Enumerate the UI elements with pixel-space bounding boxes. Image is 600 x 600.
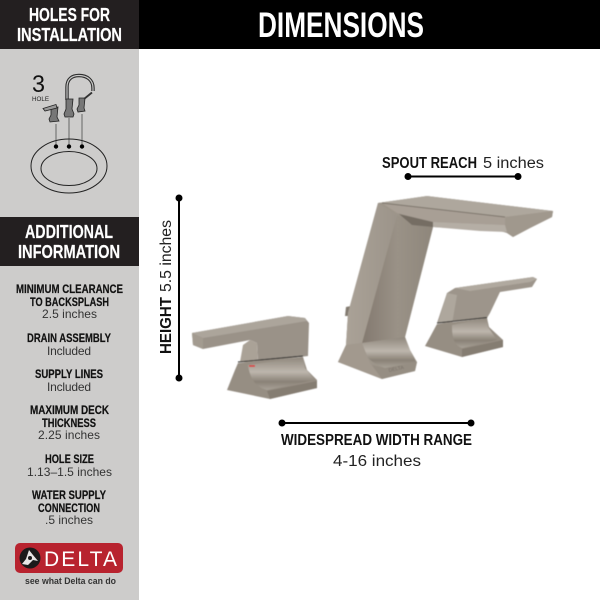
- dimension: spout reach: [382, 155, 544, 180]
- seam: [238, 356, 303, 362]
- neck facet: [438, 293, 457, 324]
- text block: maximum deck thickness: THICKNESS: [42, 418, 96, 430]
- front band: [382, 203, 505, 225]
- text block: drain assembly: [27, 333, 111, 358]
- sidebar background: [0, 0, 139, 600]
- logo: delta: [15, 543, 123, 587]
- engraved delta mark: DELTA: [388, 365, 405, 374]
- text block: minimum clearance: MINIMUM CLEARANCE: [16, 284, 123, 296]
- dimension: widespread width range: [278, 420, 474, 470]
- dimension: widespread width range: 4-16 inches: [333, 453, 421, 470]
- logo: delta: see what Delta can do: [25, 576, 116, 587]
- icon: three hole faucet and basin diagram: [31, 71, 107, 193]
- dimension: spout reach: 5 inches: [483, 155, 544, 172]
- label: 3 hole: 3: [32, 71, 45, 98]
- heading: additional information: ADDITIONAL: [25, 222, 113, 242]
- base concave: [248, 357, 315, 390]
- heading: holes for installation: INSTALLATION: [17, 25, 122, 45]
- lever top band: [192, 316, 307, 338]
- icon: basin: [31, 139, 107, 193]
- base concave: [452, 318, 497, 348]
- text block: maximum deck thickness: 2.25 inches: [38, 428, 100, 442]
- base: [425, 318, 503, 357]
- lever top band: [455, 277, 537, 291]
- illustration: left handle: [192, 316, 317, 399]
- text block: minimum clearance: TO BACKSPLASH: [30, 297, 109, 309]
- text block: minimum clearance: 2.5 inches: [42, 307, 97, 321]
- text block: maximum deck thickness: MAXIMUM DECK: [30, 405, 110, 417]
- text block: hole size: HOLE SIZE: [45, 454, 94, 466]
- bottom concave: [362, 337, 416, 368]
- dimension: height: 5.5 inches: [158, 220, 175, 292]
- heading: holes for installation: [0, 0, 139, 49]
- dimension: height: [158, 194, 182, 382]
- top plate: [378, 196, 553, 217]
- dimension: widespread width range: WIDESPREAD WIDTH RANGE: [281, 432, 472, 449]
- logo: delta: DELTA: [44, 548, 117, 571]
- body right face: [362, 215, 433, 343]
- lever body: [437, 277, 537, 323]
- label: 3 hole: [32, 71, 50, 103]
- text block: supply lines: SUPPLY LINES: [35, 369, 103, 381]
- heading: additional information: INFORMATION: [18, 242, 120, 262]
- spout end face: [505, 211, 553, 237]
- text block: hole size: [27, 454, 112, 479]
- text block: water supply connection: CONNECTION: [38, 503, 100, 515]
- lever body: [192, 316, 309, 362]
- dimension: spout reach: SPOUT REACH: [382, 155, 477, 172]
- text block: supply lines: [35, 369, 103, 394]
- dimension: height: HEIGHT: [158, 297, 175, 354]
- base: [227, 357, 317, 399]
- text block: water supply connection: WATER SUPPLY: [32, 490, 106, 502]
- text block: water supply connection: .5 inches: [45, 513, 93, 527]
- text block: supply lines: Included: [47, 380, 91, 394]
- label: 3 hole: HOLE: [32, 96, 50, 103]
- text block: drain assembly: DRAIN ASSEMBLY: [27, 333, 111, 345]
- seam: [437, 318, 487, 323]
- text block: minimum clearance: [16, 284, 123, 321]
- illustration: right handle: [425, 277, 537, 357]
- text block: hole size: 1.13–1.5 inches: [27, 465, 112, 479]
- heading: additional information: [0, 217, 139, 266]
- text block: drain assembly: Included: [47, 344, 91, 358]
- icon: delta emblem: [20, 548, 40, 568]
- text block: maximum deck thickness: [30, 405, 110, 442]
- lever neck: [240, 340, 258, 363]
- heading: dimensions: DIMENSIONS: [258, 6, 424, 45]
- body left face: [346, 203, 397, 345]
- icon: faucet: [43, 76, 93, 144]
- illustration: center spout: [338, 196, 553, 379]
- spout silhouette: [338, 196, 553, 379]
- heading: dimensions: [139, 0, 600, 49]
- base left facet: [338, 343, 382, 379]
- text block: water supply connection: [32, 490, 106, 527]
- heading: holes for installation: HOLES FOR: [29, 5, 110, 25]
- rear tab: [345, 306, 351, 316]
